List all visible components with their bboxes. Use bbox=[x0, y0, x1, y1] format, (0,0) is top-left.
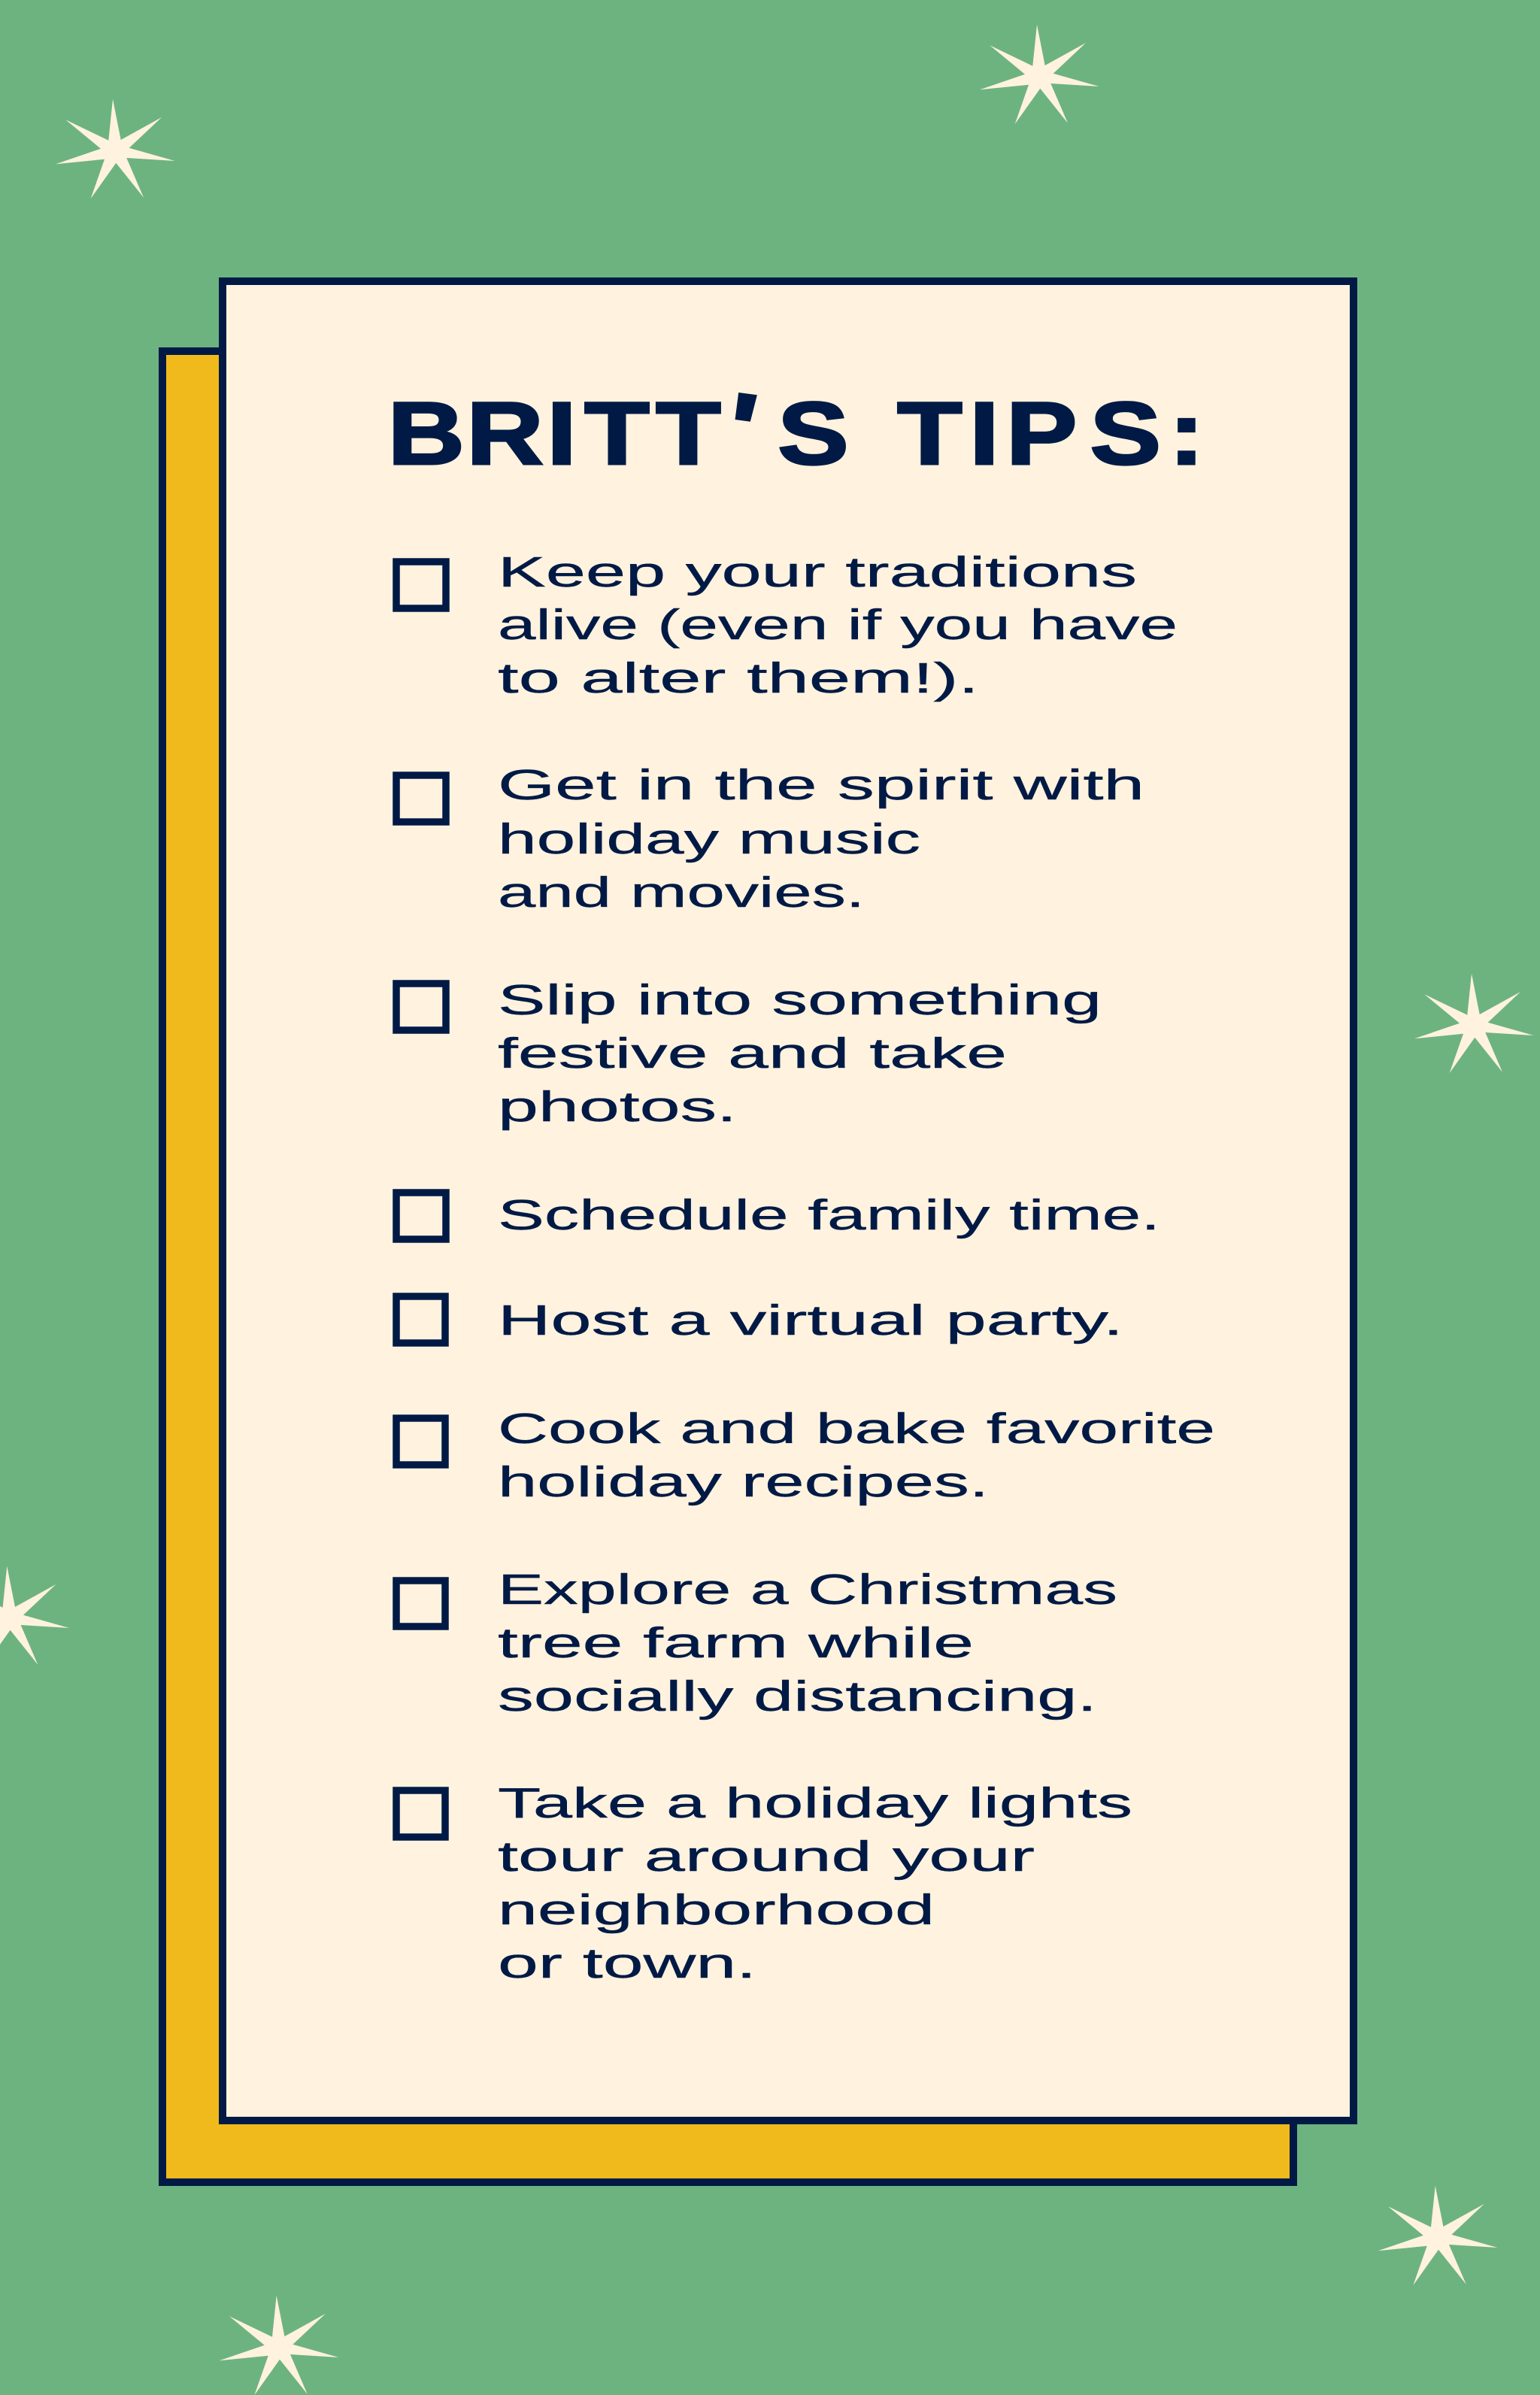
tip 7: christmas tree farm bbox=[396, 1566, 1117, 1720]
star: top centre right bbox=[980, 25, 1099, 124]
tip 3: festive photos bbox=[396, 976, 1102, 1131]
star: right edge bbox=[1414, 974, 1534, 1073]
tip 1: keep traditions bbox=[396, 548, 1178, 702]
title: ' bbox=[717, 372, 765, 487]
tip 8 text: or town. bbox=[498, 1939, 756, 1987]
tip 5: virtual party bbox=[396, 1296, 1123, 1345]
icon: checkbox 1 bbox=[396, 562, 446, 608]
icon: checkbox 8 bbox=[396, 1790, 445, 1837]
tip 4: family time bbox=[396, 1191, 1160, 1239]
tip 2 text: and movies. bbox=[498, 869, 865, 917]
icon: checkbox 7 bbox=[396, 1581, 445, 1626]
title: S TIPS: bbox=[778, 384, 1205, 483]
tip 6 text: holiday recipes. bbox=[498, 1458, 989, 1506]
icon: checkbox 6 bbox=[396, 1418, 445, 1465]
tip 1 text: to alter them!). bbox=[498, 654, 979, 702]
icon: checkbox 5 bbox=[396, 1296, 445, 1343]
tip 3 text: Slip into something bbox=[498, 976, 1102, 1024]
tip 1 text: alive (even if you have bbox=[498, 601, 1178, 649]
tip 6 text: Cook and bake favorite bbox=[498, 1405, 1215, 1453]
tip 7 text: socially distancing. bbox=[498, 1672, 1097, 1720]
tip 2 text: holiday music bbox=[498, 815, 920, 863]
icon: checkbox 2 bbox=[396, 775, 446, 822]
tip 5 text: Host a virtual party. bbox=[498, 1296, 1123, 1345]
tip 2: holiday music and movies bbox=[396, 761, 1144, 917]
tip 6: cook and bake bbox=[396, 1405, 1215, 1506]
title: BRITT bbox=[388, 384, 721, 483]
icon: checkbox 4 bbox=[396, 1193, 446, 1239]
tip 7 text: Explore a Christmas bbox=[498, 1566, 1117, 1614]
tip 3 text: festive and take bbox=[498, 1029, 1007, 1078]
tip 8 text: Take a holiday lights bbox=[498, 1779, 1132, 1827]
panel: cream tips card bbox=[223, 281, 1354, 2121]
tip 8 text: tour around your bbox=[498, 1833, 1035, 1881]
tip 7 text: tree farm while bbox=[498, 1619, 974, 1667]
tip 4 text: Schedule family time. bbox=[498, 1191, 1160, 1239]
star: bottom left bbox=[220, 2296, 338, 2395]
icon: checkbox 3 bbox=[396, 984, 446, 1030]
star: left edge bbox=[0, 1566, 69, 1666]
tip 3 text: photos. bbox=[498, 1083, 737, 1131]
panel: yellow backing card bbox=[162, 351, 1293, 2182]
star: upper left bbox=[56, 99, 175, 199]
tip 8: holiday lights tour bbox=[396, 1779, 1132, 1987]
tip 8 text: neighborhood bbox=[498, 1886, 935, 1934]
star: lower right bbox=[1378, 2186, 1497, 2285]
tip 1 text: Keep your traditions bbox=[498, 548, 1137, 596]
tip 2 text: Get in the spirit with bbox=[498, 761, 1144, 809]
